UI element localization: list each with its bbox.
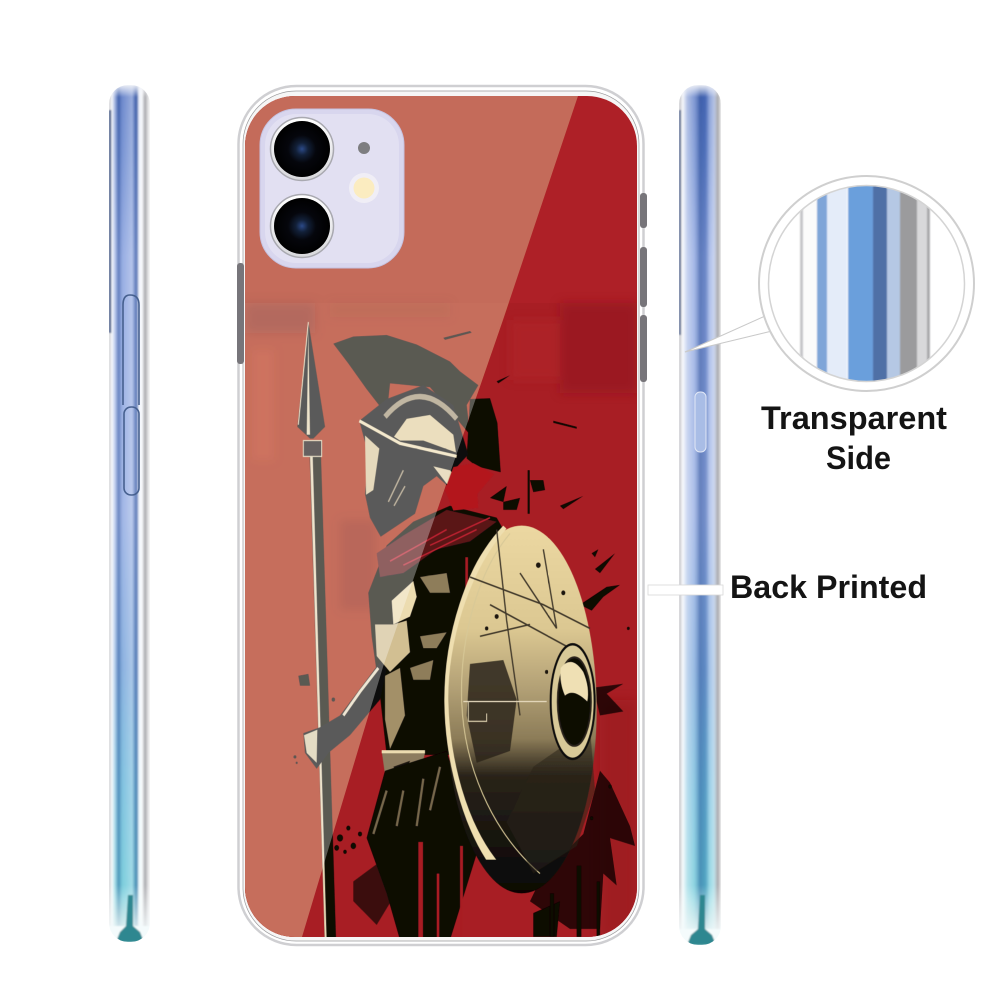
helmet bbox=[359, 385, 472, 537]
glass reflection panel bbox=[245, 96, 578, 937]
right side view of phone case bbox=[679, 85, 721, 945]
textured lower band bbox=[245, 303, 637, 937]
microphone dot bbox=[358, 142, 370, 154]
skirt bbox=[367, 751, 477, 940]
case side buttons bbox=[237, 193, 647, 382]
orange undertone of the light zone bbox=[245, 96, 578, 937]
printed artwork bbox=[245, 96, 637, 940]
camera module bbox=[260, 109, 404, 268]
red background bbox=[245, 96, 637, 937]
round shield bbox=[445, 526, 597, 893]
spear bbox=[297, 322, 336, 940]
magnified stripes bbox=[800, 186, 931, 381]
left side view of phone case bbox=[109, 85, 150, 942]
arm and hand bbox=[303, 662, 387, 769]
main phone case back bbox=[237, 86, 647, 945]
muscle highlights bbox=[375, 573, 450, 749]
label: transparent side: Transparent bbox=[761, 400, 947, 436]
paint splatter bbox=[294, 331, 635, 937]
plume bbox=[333, 335, 501, 472]
side button on right view bbox=[695, 392, 706, 452]
belt bbox=[382, 753, 426, 772]
label: transparent side: Side bbox=[826, 440, 891, 476]
callout: back printed pointer bar bbox=[648, 585, 723, 595]
callout: magnified transparent side bbox=[685, 170, 975, 400]
label: transparent side bbox=[761, 400, 947, 476]
side buttons on left view bbox=[123, 295, 139, 495]
shield boss bbox=[551, 644, 595, 759]
transparent case frame bbox=[238, 86, 644, 945]
pointer to side bbox=[685, 316, 772, 352]
red scarf at neck bbox=[445, 463, 494, 511]
lower lens bbox=[270, 194, 334, 258]
label: back printed: Back Printed bbox=[730, 569, 927, 605]
spartan warrior artwork bbox=[294, 322, 635, 940]
upper lens bbox=[270, 118, 334, 180]
body and cloak bbox=[303, 506, 503, 940]
flash bbox=[349, 173, 379, 203]
